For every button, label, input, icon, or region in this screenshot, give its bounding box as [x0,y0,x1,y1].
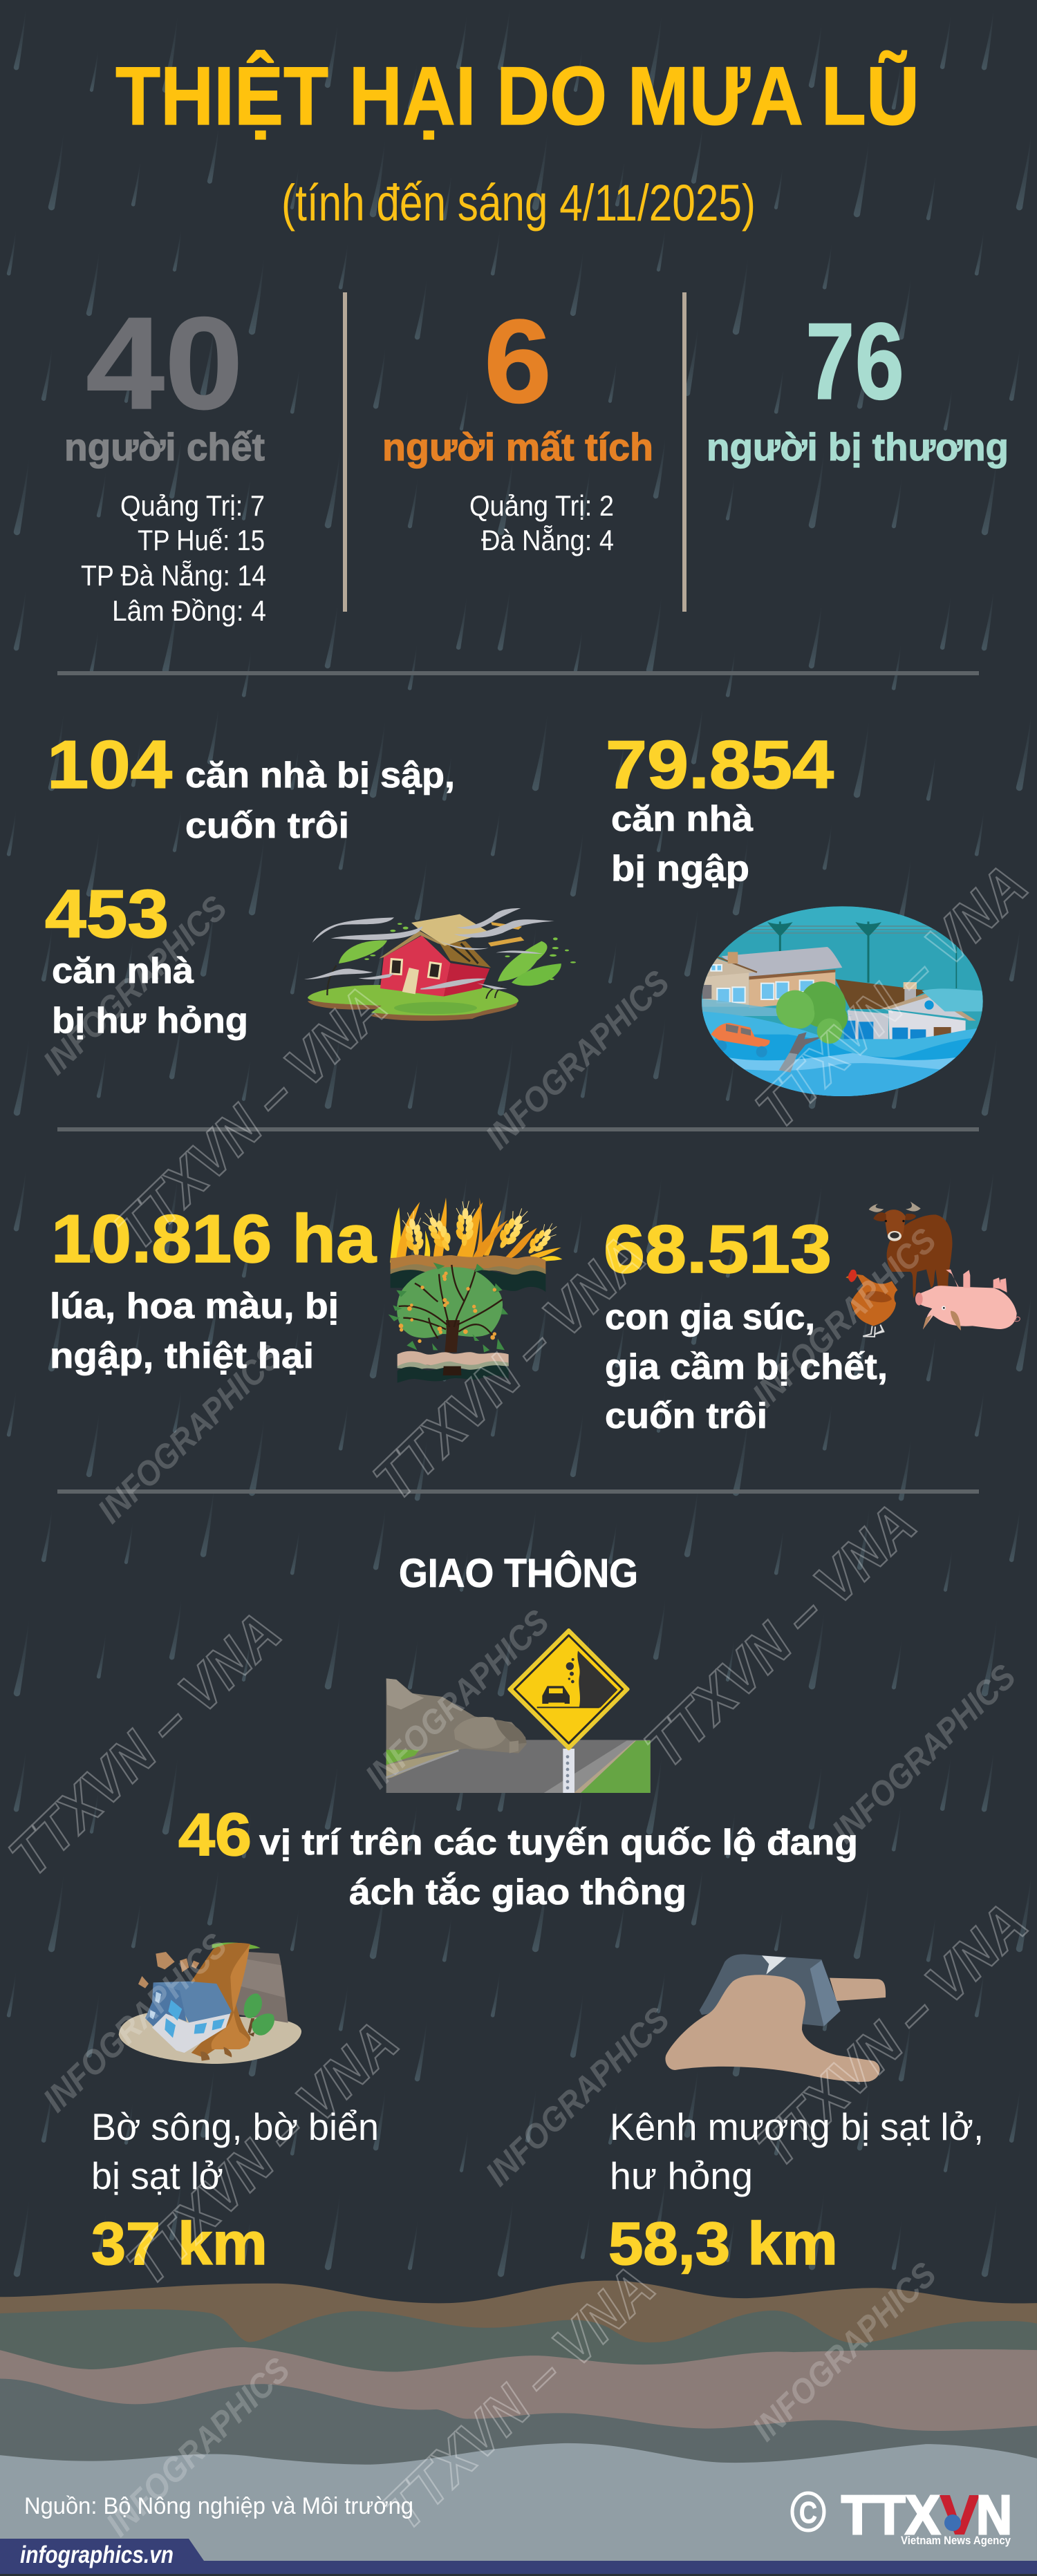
panel: injured [707,301,1009,469]
watermark: TTXVN – VNA: TTXVN – VNA [632,1491,928,1780]
panel: river bank erosion: bị sạt lở [91,2154,223,2197]
icon: wheat and fruit tree [389,1198,562,1383]
deaths breakdown: Lâm Đồng: 4 [112,594,266,627]
icon: flooded houses circle [700,905,987,1099]
panel: deaths [64,290,266,627]
logo: TTXVN: Vietnam News Agency [901,2534,1011,2547]
footer site name: infographics.vn [20,2541,174,2568]
subtitle: date: (tính đến sáng 4/11/2025) [281,174,756,232]
missing breakdown: Đà Nẵng: 4 [481,524,614,556]
deaths number: 40 [86,290,243,437]
watermark: INFOGRAPHICS: INFOGRAPHICS [478,2000,677,2193]
logo: TTXVN: V [940,2484,979,2546]
panel: canal damage [608,2105,984,2277]
watermark: INFOGRAPHICS: INFOGRAPHICS [358,1602,557,1796]
heading: traffic: GIAO THÔNG [399,1551,638,1596]
title: THIỆT HẠI DO MƯA LŨ [115,50,919,142]
deaths label: người chết [64,425,265,469]
watermark: TTXVN – VNA: TTXVN – VNA [102,973,399,1262]
watermark: TTXVN – VNA: TTXVN – VNA [0,1599,293,1888]
watermark: INFOGRAPHICS: INFOGRAPHICS [36,1926,234,2119]
footer bar [0,2539,1037,2576]
panel: blocked highway spots: ách tắc giao thông [349,1872,686,1912]
panel: damaged houses [45,876,248,1041]
watermark: TTXVN – VNA: TTXVN – VNA [361,1223,657,1512]
panel: flooded houses: căn nhà [611,799,754,839]
copyright symbol [792,2493,824,2530]
missing breakdown [469,489,614,556]
icon: eroded canal [665,1954,886,2082]
panel: collapsed houses: căn nhà bị sập, [185,755,455,796]
source note: Nguồn: Bộ Nông nghiệp và Môi trường [24,2493,413,2519]
copyright symbol: C [799,2496,817,2530]
panel: livestock: gia cầm bị chết, [605,1347,888,1387]
panel: livestock: cuốn trôi [605,1396,767,1436]
watermark: INFOGRAPHICS [36,888,1023,2544]
layered ground waves [0,2281,1037,2576]
panel: livestock: con gia súc, [605,1297,815,1337]
panel: collapsed houses [47,726,455,846]
panel: flooded houses [606,726,834,889]
watermark: INFOGRAPHICS: INFOGRAPHICS [745,2255,944,2448]
logo: TTXVN: N [976,2484,1012,2546]
watermark: INFOGRAPHICS: INFOGRAPHICS [36,888,234,1082]
watermark: INFOGRAPHICS: INFOGRAPHICS [745,1221,944,1414]
panel: crops: lúa, hoa màu, bị [50,1286,339,1326]
panel: damaged houses: 453 [45,876,169,952]
missing breakdown: Quảng Trị: 2 [469,489,614,522]
watermark: INFOGRAPHICS: INFOGRAPHICS [478,963,677,1156]
panel: river bank erosion: Bờ sông, bờ biển [91,2105,379,2148]
panel: crops [50,1201,377,1376]
injured label: người bị thương [707,425,1009,469]
panel: collapsed houses: cuốn trôi [185,806,349,846]
icon: falling rocks road sign [386,1630,651,1793]
panel: flooded houses: 79.854 [606,726,834,802]
deaths breakdown: Quảng Trị: 7 [120,489,265,522]
divider left [343,292,347,612]
panel: livestock [604,1211,888,1436]
deaths breakdown [81,489,266,627]
deaths breakdown: TP Huế: 15 [138,524,265,556]
panel: crops: ngập, thiệt hại [50,1336,314,1376]
panel: canal damage: hư hỏng [610,2154,753,2197]
divider right [682,292,686,612]
panel: blocked highway spots: 46 [178,1801,252,1868]
watermark: TTXVN – VNA: TTXVN – VNA [114,2009,411,2297]
panel: flooded houses: bị ngập [611,849,749,889]
watermark: INFOGRAPHICS: INFOGRAPHICS [99,2350,297,2544]
panel: river bank erosion [91,2105,379,2277]
panel: canal damage: Kênh mương bị sạt lở, [610,2105,984,2148]
watermark: INFOGRAPHICS: INFOGRAPHICS [91,1337,289,1530]
icon: landslide on house [119,1943,301,2064]
watermark: INFOGRAPHICS: INFOGRAPHICS [825,1657,1023,1850]
panel: river bank erosion: 37 km [91,2210,268,2277]
watermark: TTXVN – VNA [0,852,1037,2542]
panel: missing [382,295,653,556]
injured number: 76 [805,301,904,422]
panel: canal damage: 58,3 km [608,2210,838,2277]
missing number: 6 [484,295,552,428]
panel: damaged houses: căn nhà [52,951,194,991]
panel: blocked highway spots [178,1801,858,1912]
icon: cow, chicken, pig [846,1201,1020,1337]
deaths breakdown: TP Đà Nẵng: 14 [81,559,266,592]
missing label: người mất tích [382,425,653,469]
panel: collapsed houses: 104 [47,726,172,802]
icon: storm damaged house [304,908,576,1021]
panel: damaged houses: bị hư hỏng [52,1001,248,1041]
panel: livestock: 68.513 [604,1211,832,1287]
watermark: TTXVN – VNA: TTXVN – VNA [371,2253,667,2542]
logo: TTXVN: TTX [841,2484,940,2546]
panel: blocked highway spots: vị trí trên các tuyến quốc lộ đang [259,1823,858,1863]
logo: TTXVN [841,2484,1012,2547]
panel: crops: 10.816 ha [51,1201,377,1277]
